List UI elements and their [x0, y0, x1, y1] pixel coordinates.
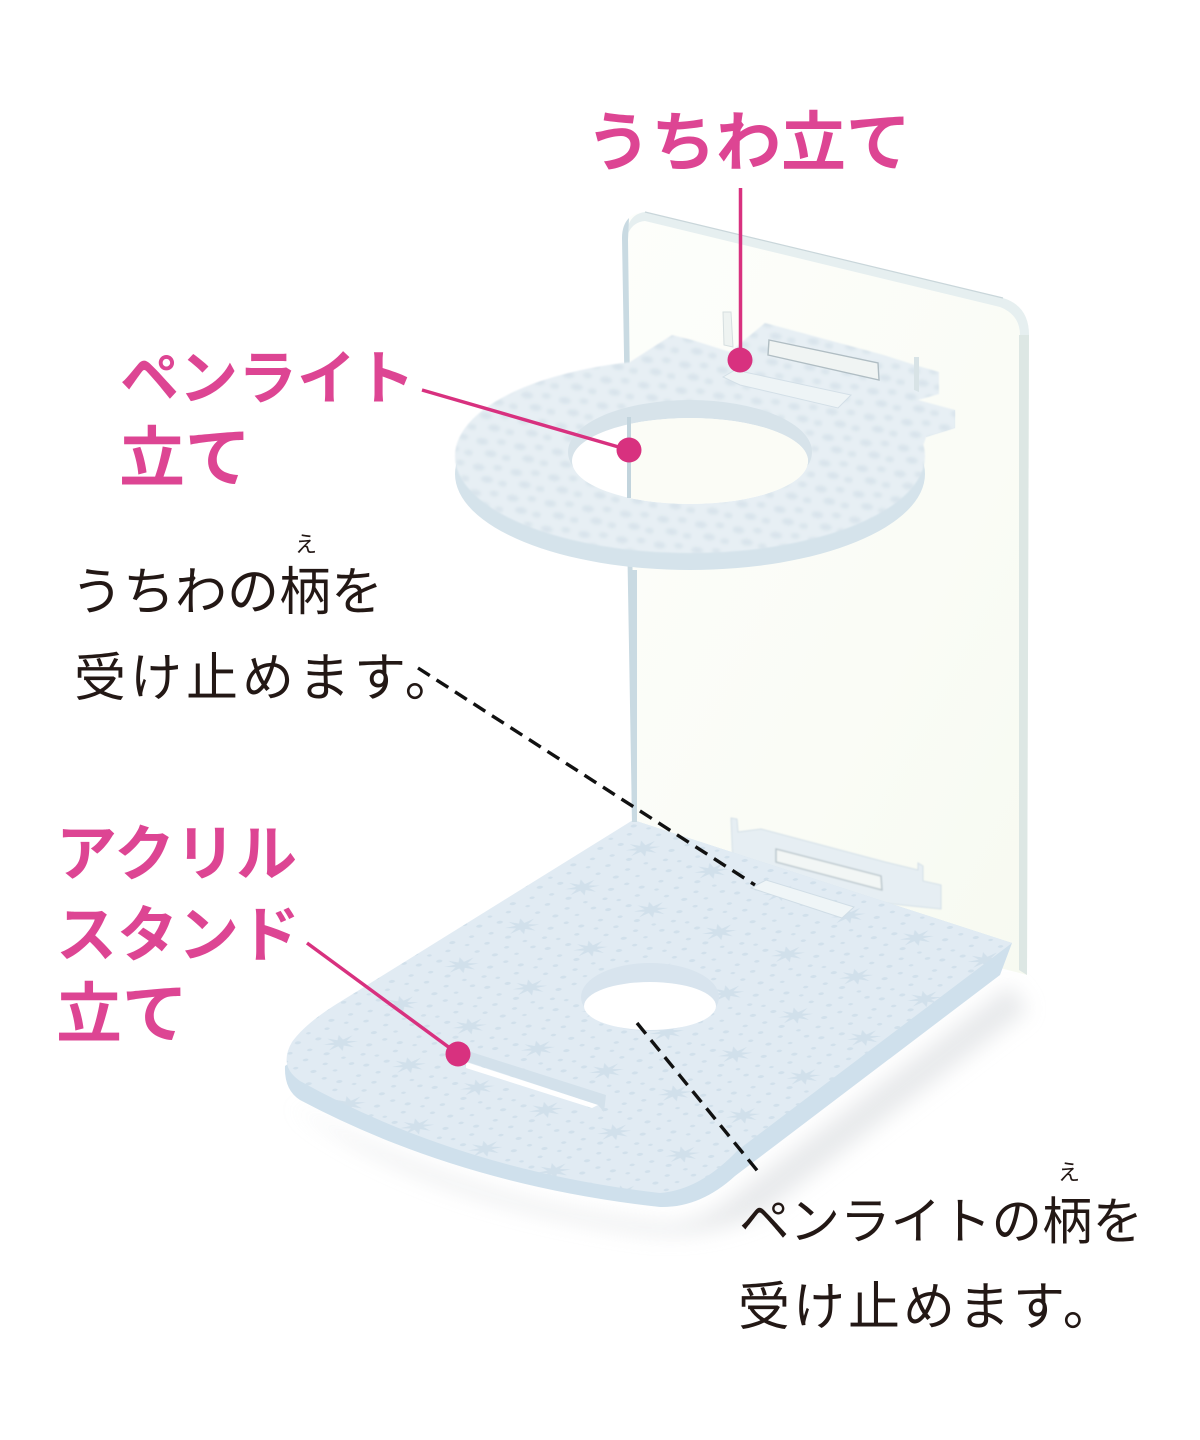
title label: acrylic stand [56, 820, 300, 1051]
acrylic stand slot [468, 1051, 606, 1112]
title label: acrylic stand: 立て [56, 977, 188, 1051]
caption: uchiwa handle: え [295, 532, 317, 557]
base plate holder clip [731, 818, 941, 909]
leader line: uchiwa stand [728, 188, 752, 372]
dashed leader: pen light handle [637, 1023, 760, 1174]
ring clip parts [723, 312, 733, 347]
caption: uchiwa handle: 受け止めます。 [74, 650, 461, 708]
base plate: star pattern acrylic [285, 820, 1012, 1207]
ring hole [568, 400, 812, 504]
title label: uchiwa stand: うちわ立て [586, 106, 911, 179]
caption: pen light handle: え [1058, 1160, 1080, 1185]
leader line: acrylic stand [307, 943, 470, 1066]
caption: pen light handle [738, 1160, 1143, 1337]
title label: pen light stand: ペンライト [120, 346, 415, 412]
upper ring: pen light holder [455, 312, 955, 570]
product photo: acrylic stand [285, 212, 1029, 1234]
title label: pen light stand [119, 346, 415, 495]
back acrylic panel [622, 212, 1029, 975]
caption: uchiwa handle: うちわの柄を [71, 564, 383, 622]
caption: uchiwa handle [71, 532, 461, 708]
caption: pen light handle: 受け止めます。 [738, 1279, 1118, 1337]
ring top surface [455, 323, 955, 553]
dashed leader: uchiwa handle [418, 668, 755, 885]
lower panel strut [630, 570, 637, 822]
base slot [751, 880, 854, 918]
leader line: pen light stand [422, 390, 642, 462]
title label: acrylic stand: スタンド [56, 901, 300, 969]
ring edge [455, 378, 925, 570]
title label: pen light stand: 立て [119, 421, 251, 495]
title label: acrylic stand: アクリル [56, 820, 297, 888]
floor shadow [292, 985, 1028, 1234]
caption: pen light handle: ペンライトの柄を [739, 1193, 1143, 1250]
pen light hole [581, 963, 719, 1031]
